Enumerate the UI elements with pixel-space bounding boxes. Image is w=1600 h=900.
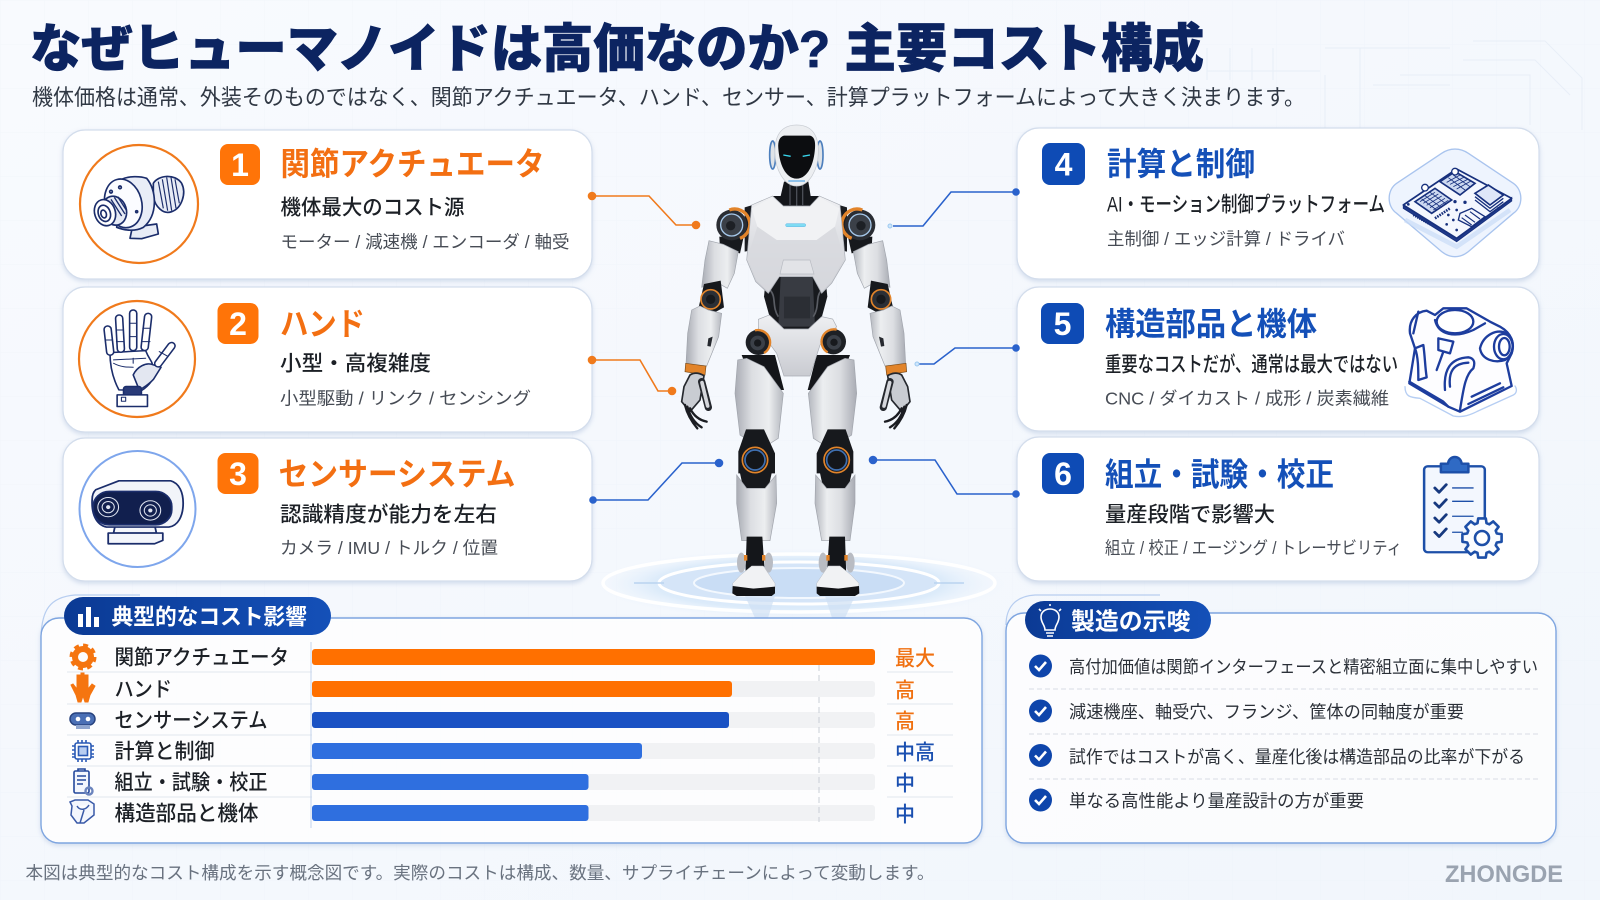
panel: typical cost impact — [41, 595, 982, 843]
bar track — [312, 774, 875, 790]
connector 3 — [590, 460, 722, 503]
bar — [312, 774, 588, 790]
value: 高 — [895, 680, 915, 702]
number badge 2 — [218, 303, 258, 344]
icon: actuator — [80, 145, 198, 263]
point 2 — [1029, 700, 1464, 722]
card 2: hand — [63, 287, 592, 432]
card 5 details: CNC / ダイカスト / 成形 / 炭素繊維 — [1105, 388, 1389, 408]
number badge 3: 3 — [229, 456, 247, 492]
number badge 1 — [220, 144, 260, 185]
icon: light bulb — [1039, 604, 1061, 636]
check icon — [1029, 788, 1052, 812]
value: 中 — [895, 772, 915, 796]
number badge 6: 6 — [1054, 456, 1072, 492]
connector 2 — [588, 356, 676, 394]
point 1 — [1029, 654, 1538, 678]
label: ハンド — [114, 678, 172, 702]
check icon — [1029, 654, 1052, 678]
torso — [747, 196, 845, 293]
row: assembly — [74, 769, 915, 796]
bar track — [312, 681, 875, 697]
card 5 heading: 構造部品と機体 — [1105, 306, 1317, 342]
bar — [312, 743, 642, 759]
card 1 summary: 機体最大のコスト源 — [280, 196, 464, 220]
abdomen — [764, 277, 827, 330]
card 1 details: モーター / 減速機 / エンコーダ / 軸受 — [280, 232, 570, 252]
check icon — [1029, 700, 1052, 722]
number badge 1: 1 — [231, 147, 249, 183]
label: 構造部品と機体 — [114, 802, 258, 826]
card 6 details: 組立 / 校正 / エージング / トレーサビリティ — [1105, 538, 1402, 558]
text: 単なる高性能より量産設計の方が重要 — [1069, 791, 1364, 811]
bar — [312, 681, 732, 697]
text: 試作ではコストが高く、量産化後は構造部品の比率が下がる — [1069, 747, 1525, 767]
card 6 summary: 量産段階で影響大 — [1105, 504, 1275, 526]
card 3 summary: 認識精度が能力を左右 — [280, 504, 497, 526]
card 2 summary: 小型・高複雑度 — [280, 352, 431, 376]
panel title: 製造の示唆 — [1071, 608, 1190, 636]
neck — [772, 182, 820, 208]
icon: bars — [78, 607, 99, 627]
icon: stereo camera — [80, 451, 196, 567]
card 5 summary: 重要なコストだが、通常は最大ではない — [1105, 354, 1398, 376]
icon: frame — [70, 800, 94, 823]
bar track — [312, 743, 875, 759]
icon: chip — [72, 740, 94, 762]
icon: hand — [71, 673, 95, 702]
point 3 — [1029, 744, 1525, 767]
number badge 3 — [218, 453, 258, 494]
value: 最大 — [895, 648, 935, 670]
card 6: assembly — [1017, 437, 1539, 581]
number badge 6 — [1042, 453, 1084, 494]
title: なぜヒューマノイドは高価なのか? 主要コスト構成 — [30, 20, 1204, 79]
footnote: 本図は典型的なコスト構成を示す概念図です。実際のコストは構成、数量、サプライチェーンによって変動します。 — [26, 863, 934, 883]
card 5: structure — [1017, 287, 1539, 431]
left arm — [682, 205, 753, 428]
icon: checklist with gear — [1424, 457, 1502, 558]
bar track — [312, 805, 875, 821]
right leg — [808, 355, 859, 596]
card 3: sensors — [63, 438, 592, 581]
right arm — [839, 205, 910, 428]
label: 関節アクチュエータ — [114, 646, 289, 670]
label: 組立・試験・校正 — [114, 772, 268, 794]
card 3 details: カメラ / IMU / トルク / 位置 — [280, 538, 498, 558]
brand mark: ZHONGDE — [1445, 861, 1563, 888]
card 4 heading: 計算と制御 — [1107, 146, 1255, 182]
value: 高 — [895, 710, 915, 734]
row: structure — [70, 800, 915, 826]
label: 計算と制御 — [114, 740, 214, 764]
card 4: compute — [1017, 128, 1539, 279]
number badge 5 — [1041, 303, 1084, 344]
row: sensors — [70, 710, 915, 734]
point 4 — [1029, 788, 1364, 812]
head — [770, 125, 823, 186]
number badge 2: 2 — [229, 306, 247, 342]
text: 減速機座、軸受穴、フランジ、筐体の同軸度が重要 — [1069, 702, 1464, 722]
connector 5 — [915, 345, 1019, 366]
panel heading — [64, 597, 331, 635]
icon: clipboard — [74, 769, 92, 794]
card 2 details: 小型駆動 / リンク / センシング — [280, 388, 531, 408]
icon: robot hand — [79, 301, 195, 417]
icon: circuit board — [1389, 149, 1521, 257]
card 1: actuator — [63, 130, 592, 279]
panel title: 典型的なコスト影響 — [112, 604, 307, 630]
card 4 summary: AI・モーション制御プラットフォーム — [1107, 194, 1385, 216]
panel heading — [1025, 601, 1211, 639]
icon: robot frame — [1405, 308, 1516, 417]
check icon — [1029, 744, 1052, 767]
text: 高付加価値は関節インターフェースと精密組立面に集中しやすい — [1069, 657, 1538, 677]
card 1 heading: 関節アクチュエータ — [280, 146, 544, 182]
bar — [312, 712, 729, 728]
value: 中 — [895, 804, 915, 826]
icon: camera — [70, 713, 95, 729]
row: actuator — [72, 646, 935, 670]
label: センサーシステム — [114, 710, 268, 732]
card 4 details: 主制御 / エッジ計算 / ドライバ — [1107, 229, 1345, 249]
left leg — [732, 355, 784, 596]
connector 1 — [588, 192, 700, 228]
panel: manufacturing implications — [1006, 595, 1556, 843]
connector lines — [588, 189, 1019, 503]
hip joints — [746, 329, 846, 355]
row: hand — [71, 673, 915, 702]
bar — [312, 805, 588, 821]
platform under robot — [593, 548, 1005, 620]
number badge 5: 5 — [1054, 306, 1071, 342]
number badge 4 — [1042, 143, 1085, 185]
connector 4 — [888, 189, 1019, 228]
number badge 4: 4 — [1055, 146, 1073, 182]
pelvis — [758, 315, 837, 376]
card 2 heading: ハンド — [280, 306, 365, 342]
humanoid robot — [682, 125, 910, 596]
value: 中高 — [895, 742, 935, 764]
bar — [312, 649, 875, 665]
row: compute — [72, 740, 935, 764]
bar track — [312, 712, 875, 728]
icon: gear — [72, 646, 94, 668]
card 3 heading: センサーシステム — [278, 456, 516, 492]
subtitle: 機体価格は通常、外装そのものではなく、関節アクチュエータ、ハンド、センサー、計算プラットフォームによって大きく決まります。 — [32, 85, 1305, 110]
connector 6 — [870, 456, 1019, 497]
card 6 heading: 組立・試験・校正 — [1105, 456, 1334, 492]
